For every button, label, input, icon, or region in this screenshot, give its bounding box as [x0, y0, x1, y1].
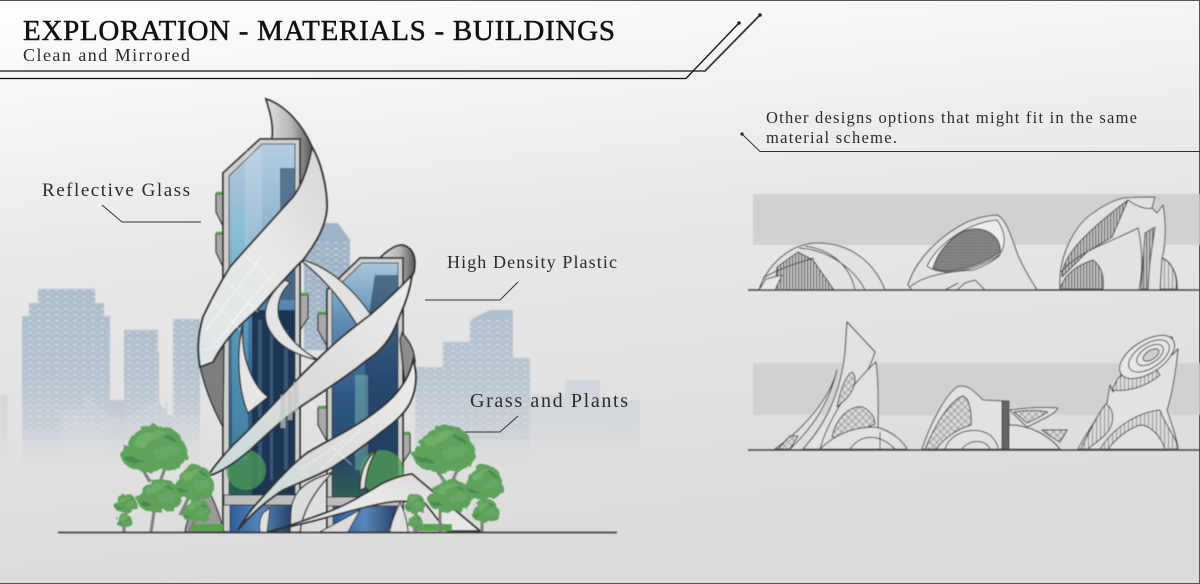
- inner curl ribbon tower 1: [239, 325, 268, 413]
- ribbon mesh detail: [204, 255, 278, 350]
- label: high density plastic: High Density Plastic: [447, 252, 617, 272]
- sketch: contoured tower: [1078, 327, 1182, 449]
- note: other design options: material scheme.: [766, 128, 897, 147]
- ground line: [748, 289, 1200, 291]
- right tree cluster: [404, 425, 503, 532]
- back dark ribbon sliver: [400, 333, 415, 385]
- sketch: sail spikes: [775, 322, 907, 449]
- note: other design options: Other designs options that might fit in the same: [766, 108, 1137, 127]
- lower curl ribbons: [290, 472, 333, 532]
- building illustration: [58, 99, 617, 532]
- back curl ribbon toward tower 2: [303, 260, 373, 330]
- header: [0, 13, 762, 79]
- sketch: arched dome: [759, 243, 885, 290]
- ground line: [58, 532, 617, 534]
- tower 1: [223, 139, 300, 532]
- left tree cluster: [114, 425, 214, 532]
- sketch: low meshed form: [922, 386, 1067, 449]
- grey band: [753, 194, 1200, 245]
- main ribbon tower 1: [198, 147, 327, 367]
- sketch: tilted oval: [908, 215, 1037, 290]
- middle ribbon: [208, 275, 412, 476]
- back curl ribbon crescent: [265, 280, 318, 360]
- dark underside of main ribbon: [200, 345, 224, 427]
- note: other design options: [740, 108, 1200, 152]
- tower 2: [327, 258, 404, 532]
- subtitle: Clean and Mirrored: [23, 45, 190, 65]
- grass patches: [191, 524, 452, 531]
- lower sweeping ribbon: [238, 360, 416, 530]
- label: reflective glass: [42, 180, 201, 222]
- low fog over skyline: [0, 440, 650, 500]
- label: high density plastic: [425, 252, 617, 300]
- background city skyline: [0, 222, 640, 450]
- grey band: [753, 363, 1200, 415]
- panel: alternate designs row 2: [748, 322, 1200, 450]
- title: EXPLORATION - MATERIALS - BUILDINGS: [23, 15, 615, 47]
- header rule lines: [0, 13, 762, 79]
- label: grass and plants: Grass and Plants: [470, 390, 628, 412]
- sketch: ribbed shell: [1060, 197, 1177, 290]
- panel: alternate designs row 1: [748, 194, 1200, 290]
- balconies: [216, 193, 410, 462]
- ground line: [748, 449, 1200, 451]
- label: reflective glass: Reflective Glass: [42, 180, 190, 201]
- label: grass and plants: [465, 390, 628, 432]
- grey mound behind left trees: [185, 488, 224, 532]
- ribbon back spike tower 2: [380, 245, 415, 300]
- ribbon back spike tower 1: [266, 99, 312, 190]
- low ground ribbon: [267, 474, 480, 532]
